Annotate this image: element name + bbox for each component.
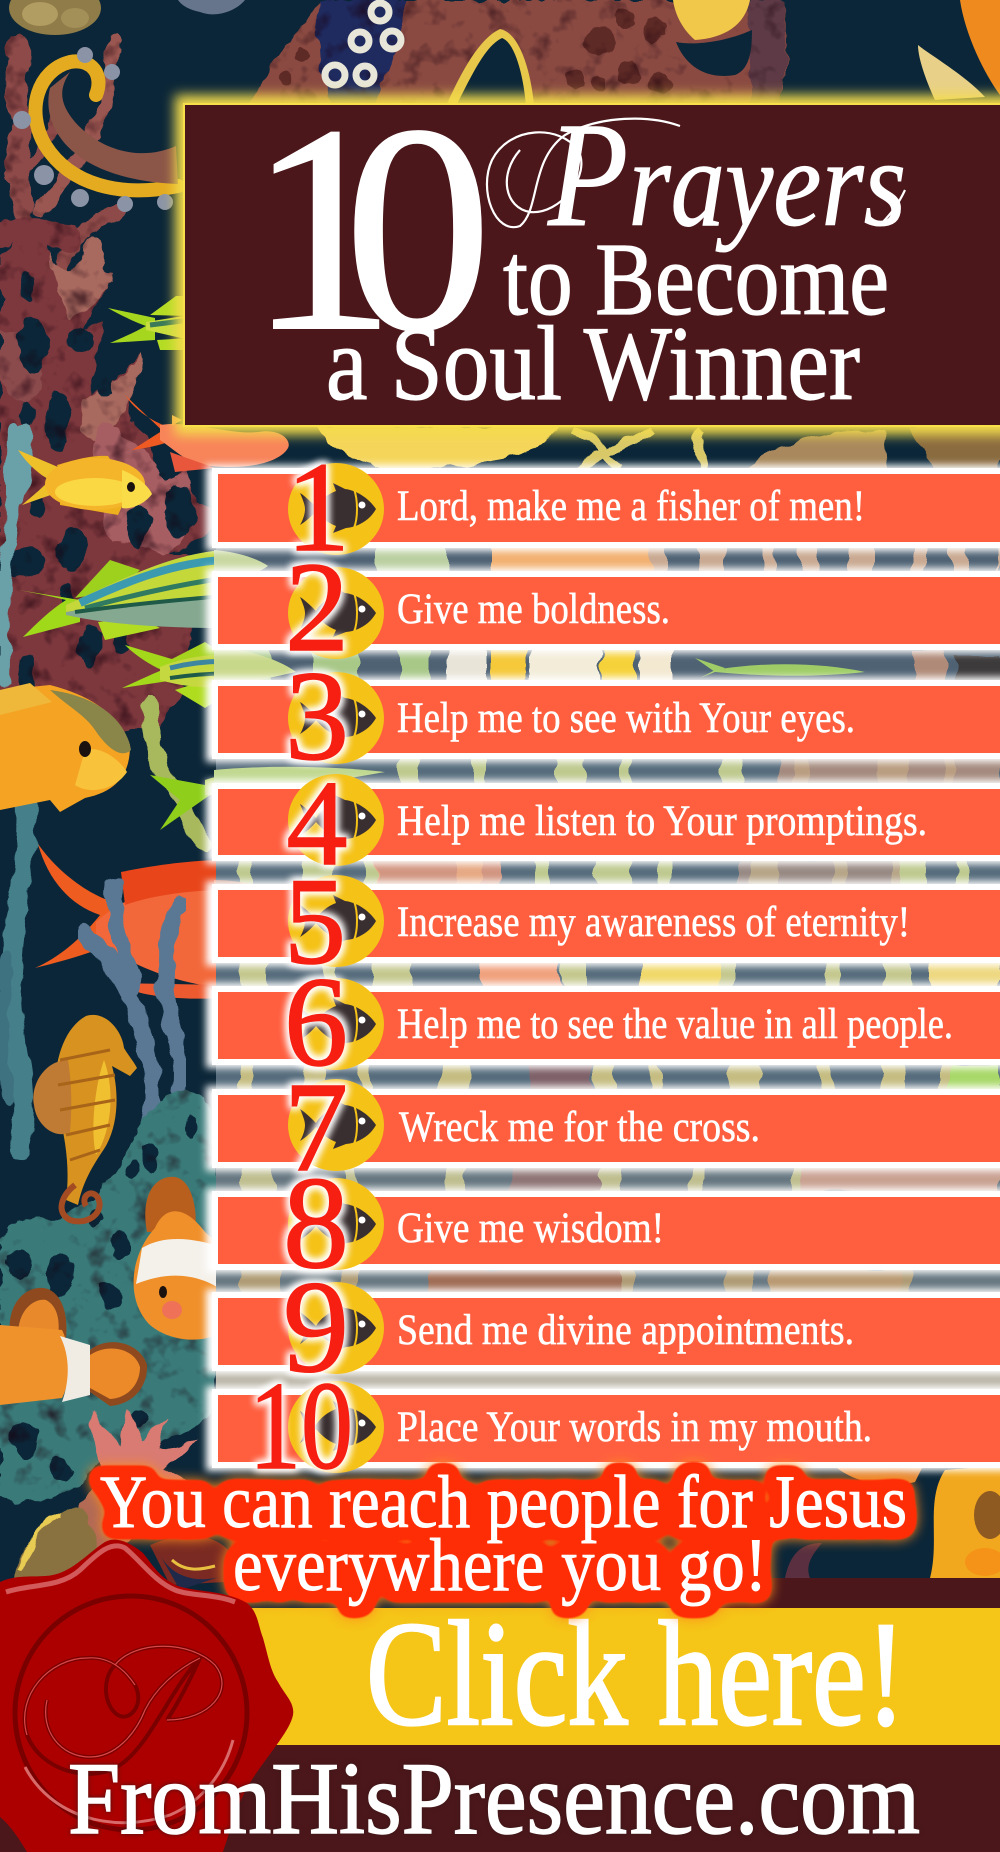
green fish 3: [122, 642, 296, 708]
maroon coral: [0, 40, 220, 730]
row 1: [206, 436, 1000, 578]
octopus at top: [240, 0, 786, 110]
washed-out strips between rows: [214, 540, 1000, 1397]
big orange fish: [0, 683, 131, 812]
row 10: Place Your words in my mouth.: [397, 1404, 872, 1451]
panel border: [183, 103, 1000, 427]
seahorse: [33, 1015, 137, 1221]
seal inner ring: [15, 1596, 247, 1830]
clownfish 1: [134, 1177, 225, 1340]
row 3: 3: [285, 645, 349, 787]
octopus sucker rings: [325, 3, 401, 85]
yellow fish: [18, 450, 152, 515]
callout: reach people: [100, 1461, 907, 1607]
title line 2: to Become: [503, 222, 889, 337]
row 8: 8: [283, 1149, 349, 1296]
callout: reach people: everywhere you go!: [233, 1524, 767, 1607]
bottom left sponge: [14, 1509, 105, 1582]
seal body: [0, 1540, 293, 1852]
bottom right orange sponge: [830, 1462, 1000, 1580]
row 6: 6: [284, 951, 348, 1093]
row 9: Send me divine appointments.: [397, 1307, 854, 1354]
row 2: [206, 536, 1000, 678]
row 5: [206, 853, 1000, 990]
footer maroon bands: [0, 1578, 1000, 1852]
row 4: 4: [286, 756, 348, 891]
pale fish continuing in strips: [214, 550, 865, 905]
row 7: 7: [284, 1056, 348, 1198]
orange-red fish: [35, 844, 225, 999]
row 4: Help me listen to Your promptings.: [397, 798, 927, 845]
top right orange fish: [918, 0, 1000, 100]
row 2: Give me boldness.: [397, 586, 670, 633]
row 1: Lord, make me a fisher of men!: [397, 483, 865, 530]
green fish 4: [150, 767, 380, 830]
blue-grey seaweed: [83, 885, 181, 1120]
clownfish 2: [0, 1288, 147, 1406]
row 7: [206, 1056, 1000, 1198]
row 4: [206, 756, 1000, 891]
decorative swash of script P: [487, 119, 905, 227]
row 9: [206, 1253, 1000, 1400]
top left sponge and rocks: [9, 0, 245, 35]
wax seal: [0, 1540, 293, 1852]
seal top highlight: [6, 1546, 235, 1602]
green fish 1: [108, 296, 190, 350]
title numeral: 10: [248, 65, 483, 393]
row 2: 2: [285, 536, 349, 678]
red-orange fish: [125, 395, 289, 472]
title script word: Prayers: [547, 92, 906, 258]
row 9: 9: [283, 1253, 349, 1400]
row 10: [206, 1357, 1000, 1496]
row 8: [206, 1149, 1000, 1296]
panel glow: [175, 95, 1000, 435]
bottom creatures: [150, 1536, 822, 1590]
row 8: Give me wisdom!: [397, 1205, 664, 1252]
gap above row 1: [315, 425, 1000, 470]
row 3: [206, 645, 1000, 787]
panel fill: [185, 105, 1000, 425]
teal coral: [0, 1089, 214, 1504]
title line 3: a Soul Winner: [326, 305, 860, 422]
seal lower ring highlight: [25, 1740, 233, 1823]
row 6: [206, 951, 1000, 1093]
seal monogram P: [25, 1646, 222, 1774]
upper coral branches: [0, 40, 118, 270]
tentacle with yellow suckers: [13, 47, 178, 212]
row 5: 5: [284, 853, 346, 990]
teal seaweed: [3, 430, 205, 1150]
row 10: 10: [249, 1357, 353, 1496]
row 1: 1: [286, 436, 350, 578]
green fish 2: [12, 550, 225, 640]
title panel: [175, 65, 1000, 435]
pink anemone: [76, 1408, 198, 1549]
row 3: Help me to see with Your eyes.: [397, 695, 855, 742]
row 5: Increase my awareness of eternity!: [397, 899, 910, 946]
callout: reach people: You can reach people for Jesus: [100, 1461, 907, 1544]
row 7: Wreck me for the cross.: [399, 1104, 760, 1151]
